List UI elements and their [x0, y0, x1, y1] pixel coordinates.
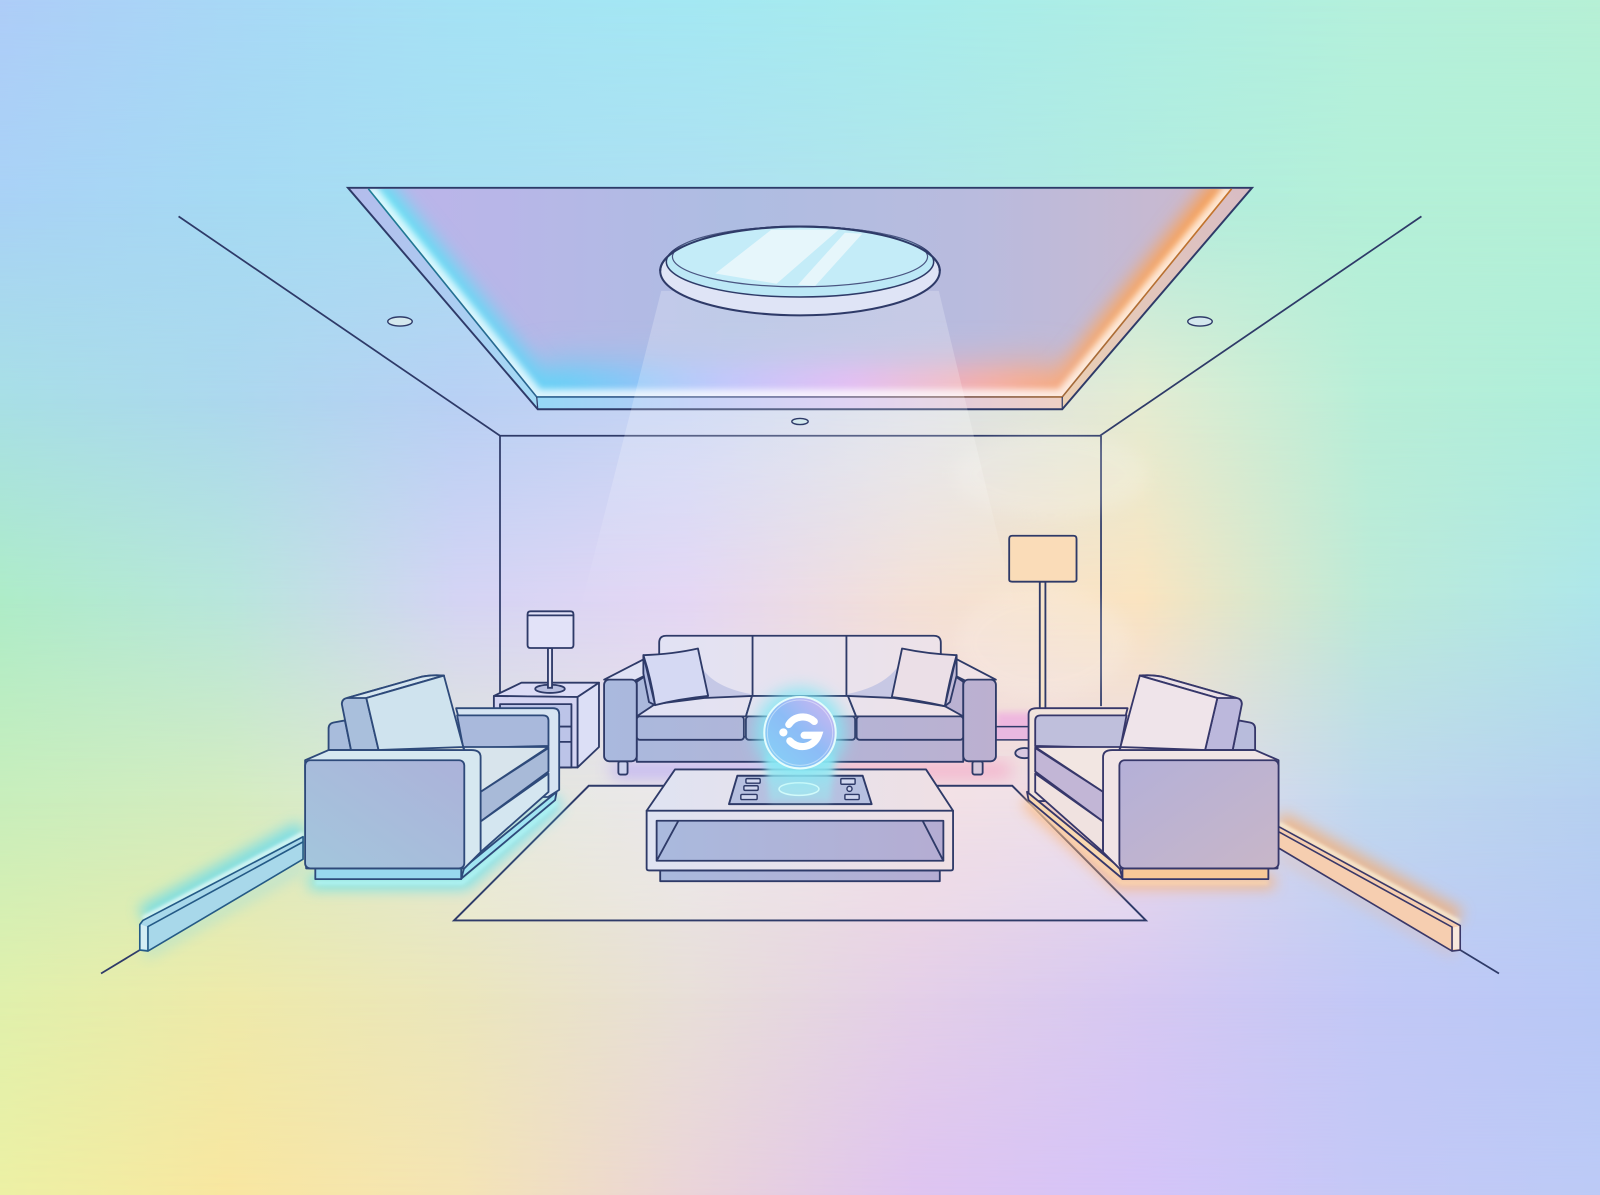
right baseboard LED strip	[1279, 820, 1460, 953]
sofa base	[637, 737, 963, 762]
seat band	[1035, 748, 1103, 821]
seat top	[463, 747, 548, 792]
glowing G logo orb	[755, 688, 845, 778]
left armchair floor glow	[309, 800, 558, 883]
front panel	[1119, 760, 1279, 868]
plinth	[315, 868, 461, 879]
left baseboard LED strip	[140, 831, 303, 954]
base diagonal	[461, 792, 557, 879]
cushion side	[1140, 675, 1242, 750]
back frame	[329, 720, 351, 750]
side table	[494, 683, 599, 767]
illustration: living room line drawing	[100, 186, 1500, 974]
far arm inner	[1035, 715, 1127, 748]
glow under sofa	[612, 763, 1010, 778]
oval skylight	[660, 227, 940, 315]
left arm inner	[637, 674, 663, 719]
lower side	[481, 774, 548, 852]
left pillow	[643, 649, 708, 705]
far arm inner	[457, 715, 548, 748]
left arm top	[604, 659, 649, 681]
right arm top	[951, 659, 996, 681]
right arm inner	[937, 674, 963, 719]
seat tops	[637, 696, 752, 716]
skylight light beam	[580, 291, 1016, 612]
icon: G mark	[781, 717, 818, 747]
room outline: ceiling and wall lines	[101, 216, 1499, 974]
legs	[618, 761, 628, 775]
back cushions	[659, 636, 941, 698]
seat band	[481, 748, 548, 821]
right armchair	[1027, 675, 1279, 879]
floor lamp	[1009, 536, 1077, 758]
sofa	[604, 636, 996, 775]
back cushion	[1120, 676, 1217, 750]
back cushion	[366, 676, 463, 750]
seat top	[1035, 747, 1120, 792]
coffee table	[647, 769, 953, 881]
right armchair floor glow	[1027, 800, 1274, 883]
left armchair	[305, 675, 559, 879]
cushion side	[342, 675, 444, 750]
table control panel	[729, 776, 872, 804]
rug	[454, 786, 1146, 920]
far arm outer	[456, 708, 559, 797]
table lamp	[528, 611, 573, 693]
front panel	[305, 760, 464, 868]
left arm front	[604, 680, 637, 761]
rear baseboard with glow	[996, 712, 1033, 740]
base diagonal	[1027, 792, 1122, 879]
pillow shadows on back cushions	[700, 663, 898, 698]
hologram beam and base ring	[765, 755, 835, 802]
seat fronts	[637, 716, 744, 740]
lower side	[1035, 774, 1103, 852]
soft lamp glows	[954, 432, 1148, 699]
ceiling tray with LED cove glow	[348, 188, 1252, 409]
back frame	[1233, 720, 1255, 750]
right arm front	[963, 680, 996, 761]
plinth	[1122, 868, 1268, 879]
top and side face	[305, 750, 481, 868]
right pillow	[892, 649, 957, 706]
top and side face	[1103, 750, 1279, 868]
far arm outer	[1029, 708, 1128, 801]
recessed ceiling lights	[388, 317, 1212, 425]
